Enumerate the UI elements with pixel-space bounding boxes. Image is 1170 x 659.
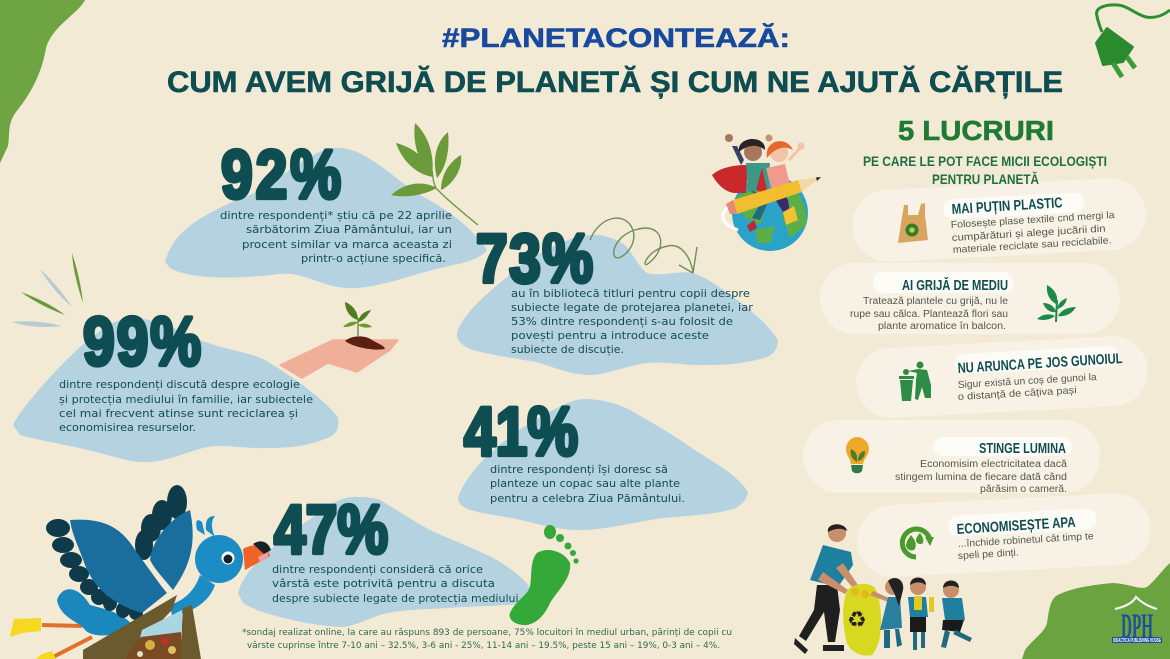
illustration: children on pencil and globe xyxy=(712,134,821,251)
description: printr-o acțiune specifică. xyxy=(301,253,446,265)
body xyxy=(958,372,1097,403)
icon: person throwing litter in bin xyxy=(899,362,931,401)
panel: nu arunca pe jos gunoiul xyxy=(854,334,1150,420)
title: ECONOMISEȘTE APA xyxy=(956,515,1076,538)
body: Sigur există un coș de gunoi la xyxy=(958,372,1097,391)
icon: rays xyxy=(12,253,83,327)
description: dintre respondenți discută despre ecologie xyxy=(59,379,300,391)
label background xyxy=(873,272,1013,293)
head and crest xyxy=(196,516,215,537)
description: 53% dintre respondenți s-au folosit de xyxy=(511,316,733,328)
description xyxy=(220,210,452,265)
blob xyxy=(13,318,338,462)
description: povești pentru a introduce aceste xyxy=(511,330,709,342)
description: subiecte legate de protejarea planetei, iar xyxy=(511,302,754,314)
dark feathers xyxy=(46,485,187,620)
upper wing xyxy=(150,510,193,590)
blob xyxy=(165,148,487,288)
footnote xyxy=(242,628,732,651)
sack xyxy=(83,595,177,659)
pill xyxy=(854,334,1150,420)
panel: stat 99% xyxy=(13,304,338,462)
description: dintre respondenți* știu că pe 22 aprilie xyxy=(220,210,452,222)
heading sub line 2: PENTRU PLANETĂ xyxy=(932,171,1039,187)
running boy xyxy=(941,580,972,648)
body xyxy=(895,459,1067,495)
pill xyxy=(850,176,1148,264)
description: au în bibliotecă titluri pentru copii despre xyxy=(511,288,750,300)
panel: stinge lumina xyxy=(803,420,1100,495)
cape xyxy=(712,165,748,193)
icon: plug xyxy=(1096,5,1170,77)
body: Folosește plase textile cnd mergi la xyxy=(951,210,1115,231)
title: MAI PUȚIN PLASTIC xyxy=(951,195,1063,218)
title xyxy=(167,22,1063,99)
green corner: top left xyxy=(0,0,85,163)
icon: bulb xyxy=(846,437,869,473)
description: vârstă este potrivită pentru a discuta xyxy=(272,578,495,590)
description: economisirea resurselor. xyxy=(59,422,196,434)
globe xyxy=(732,175,808,251)
logo strip xyxy=(1112,637,1162,643)
label background xyxy=(933,437,1072,456)
tail xyxy=(57,589,132,635)
description: pentru a celebra Ziua Pământului. xyxy=(490,493,685,505)
body xyxy=(958,531,1094,562)
pill xyxy=(855,491,1153,579)
title: STINGE LUMINA xyxy=(979,441,1066,457)
icon: green footprint xyxy=(510,525,579,625)
lower wing xyxy=(70,520,167,613)
legs and boots xyxy=(42,625,92,657)
icon: bag xyxy=(898,203,928,243)
percentage: 47% xyxy=(274,492,388,568)
pencil xyxy=(733,180,802,214)
label background xyxy=(955,346,1119,374)
body: părăsim o cameră. xyxy=(980,484,1067,495)
man xyxy=(794,524,858,654)
heading: 5 lucruri xyxy=(863,115,1107,187)
panel: economisește apa xyxy=(855,491,1153,579)
title line 2: CUM AVEM GRIJĂ DE PLANETĂ ȘI CUM NE AJUTĂ CĂRȚILE xyxy=(167,65,1063,99)
illustration: blue bird xyxy=(10,485,271,659)
panel: mai puțin plastic xyxy=(850,176,1148,264)
recycling bag xyxy=(843,584,881,656)
girl xyxy=(870,578,903,648)
description: sărbătorim Ziua Pământului, iar un xyxy=(246,224,452,236)
logo roof xyxy=(1115,597,1157,609)
description: cel mai frecvent atinse sunt reciclarea și xyxy=(59,408,298,420)
panel: stat 41% xyxy=(458,394,748,530)
body xyxy=(951,210,1115,256)
description: procent similar va marca aceasta zi xyxy=(242,239,452,251)
panel: stat 73% xyxy=(457,221,778,375)
boy xyxy=(746,163,770,192)
blob xyxy=(457,235,778,375)
description: și protecția mediului în familie, iar subiectele xyxy=(59,394,313,406)
body: stingem lumina de fiecare dată când xyxy=(895,472,1067,483)
heading main: 5 LUCRURI xyxy=(898,115,1054,146)
arrow: swirl xyxy=(590,218,697,273)
green corner: bottom right xyxy=(1022,563,1170,659)
blob xyxy=(238,497,530,627)
title: NU ARUNCA PE JOS GUNOIUL xyxy=(957,351,1123,377)
body: ...închide robinetul cât timp te xyxy=(958,531,1094,550)
description xyxy=(490,464,685,505)
panel: stat 47% xyxy=(238,492,530,627)
logo: DPH xyxy=(1112,597,1162,646)
body: Tratează plantele cu grijă, nu le xyxy=(863,296,1008,307)
girl xyxy=(766,164,790,192)
body: rupe sau călca. Plantează flori sau xyxy=(850,309,1008,320)
footnote: *sondaj realizat online, la care au răspuns 893 de persoane, 75% locuitori în mediul urban, părinți de copii cu xyxy=(242,628,732,638)
pill xyxy=(820,263,1120,334)
eye xyxy=(222,552,234,564)
percentage: 92% xyxy=(221,137,341,213)
percentage: 73% xyxy=(476,221,593,297)
illustration: family recycling: ♻ xyxy=(847,608,867,633)
title: AI GRIJĂ DE MEDIU xyxy=(902,277,1008,294)
title line 1: #PLANETACONTEAZĂ: xyxy=(442,22,790,53)
body: materiale reciclate sau reciclabile. xyxy=(953,235,1112,256)
icon: water cycle xyxy=(902,529,934,557)
description: dintre respondenți își doresc să xyxy=(490,464,668,476)
body: cumpărături și alege jucării din xyxy=(952,224,1106,244)
boy with bottles xyxy=(908,578,934,650)
footnote: vârste cuprinse între 7-10 ani – 32.5%, 3-6 ani - 25%, 11-14 ani – 19.5%, peste 15 ani – 19%, 0-3 ani – 4%. xyxy=(247,641,720,651)
description: planteze un copac sau alte plante xyxy=(490,478,680,490)
description: despre subiecte legate de protecția mediului. xyxy=(272,593,522,605)
body: plante aromatice în balcon. xyxy=(878,321,1006,332)
percentage: 41% xyxy=(464,394,578,470)
icon: hand with seedling xyxy=(280,302,398,378)
label background xyxy=(943,192,1084,220)
illustration: family recycling xyxy=(794,524,972,656)
description: dintre respondenți consideră că orice xyxy=(272,564,483,576)
description xyxy=(272,564,522,605)
description xyxy=(511,288,754,356)
description xyxy=(59,379,313,434)
body xyxy=(850,296,1008,332)
icon: sprig xyxy=(1037,285,1076,322)
description: subiecte de discuție. xyxy=(511,344,624,356)
icon: leafy branch xyxy=(391,123,478,225)
beak xyxy=(243,545,270,570)
blob xyxy=(458,399,748,530)
body: Economisim electricitatea dacă xyxy=(920,459,1067,470)
neck xyxy=(170,575,215,616)
heading sub line 1: PE CARE LE POT FACE MICII ECOLOGIȘTI xyxy=(863,153,1107,169)
panel: ai grijă de mediu xyxy=(820,263,1120,334)
pill xyxy=(803,420,1100,493)
percentage: 99% xyxy=(83,304,201,380)
body: o distanță de câțiva pași xyxy=(958,385,1077,403)
label background xyxy=(948,508,1097,537)
body: speli pe dinți. xyxy=(958,548,1019,562)
panel: stat 92% xyxy=(165,137,487,288)
